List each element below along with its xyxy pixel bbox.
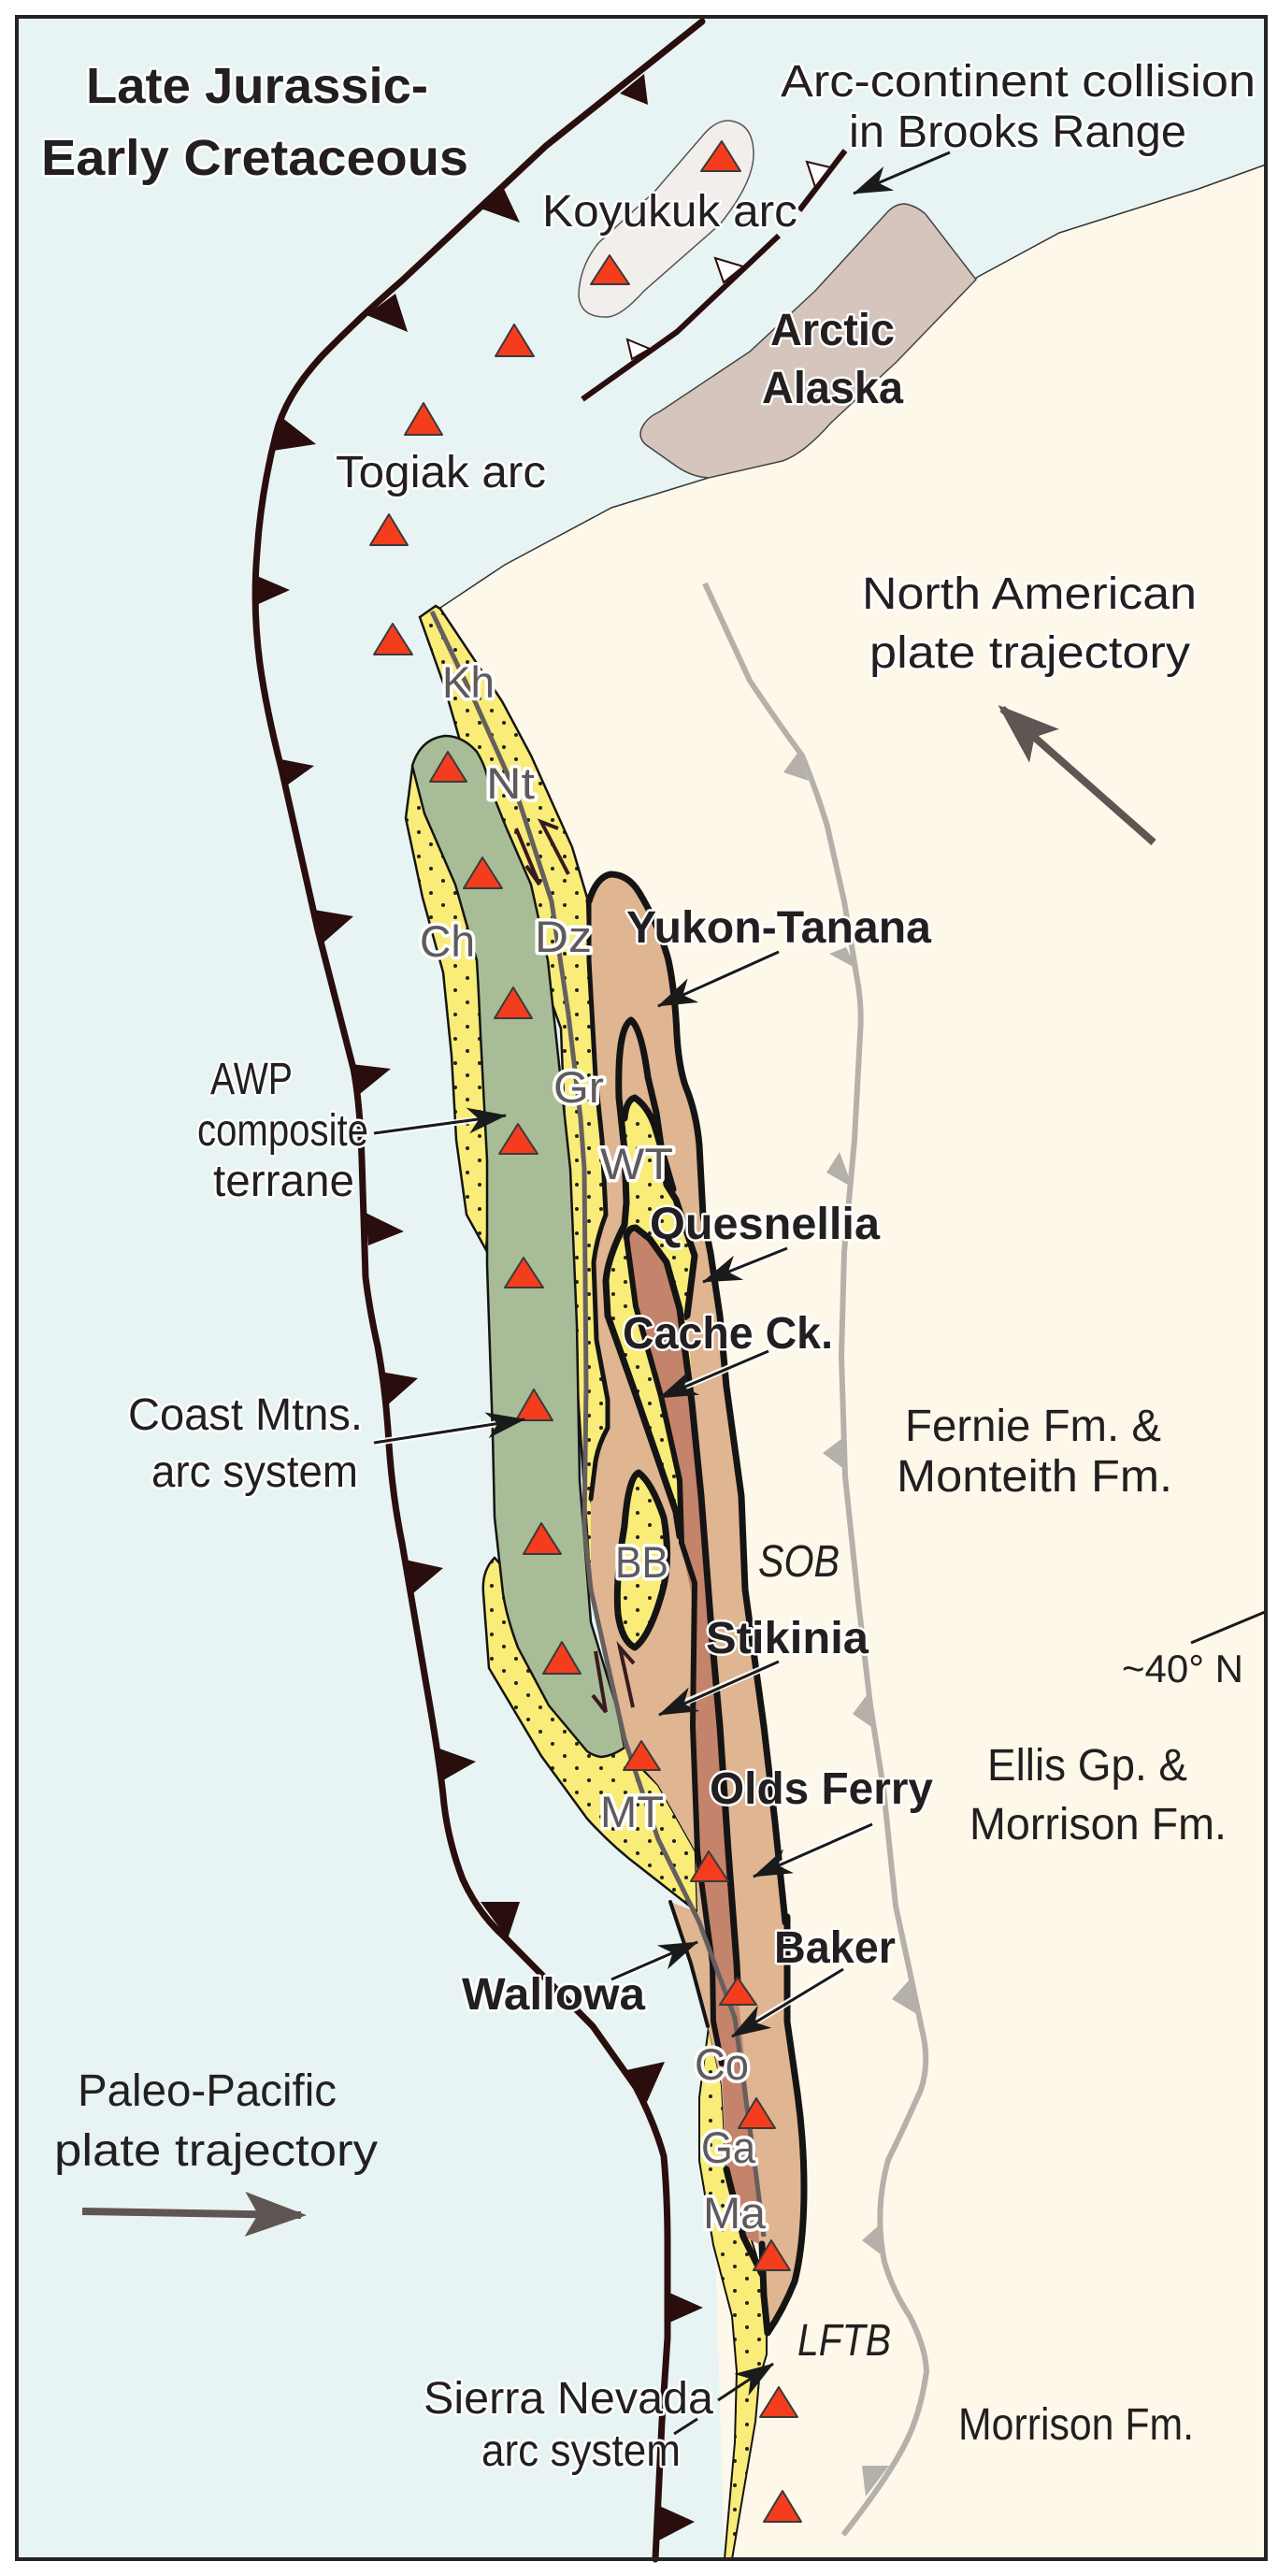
label: Kh: Kh [442,657,495,707]
label: Coast Mtns. arc system [128,1390,363,1497]
label: Sierra Nevada arc system: arc system [481,2426,681,2476]
label: Cache Ck.: Cache Ck. [623,1309,833,1359]
label: Ellis Gp. & Morrison Fm.: Ellis Gp. & [987,1741,1187,1791]
terrane: WT and Cache Creek yellow basin [606,1098,696,1536]
fault: grey strike-slip fault [432,612,764,2237]
label: Paleo-Pacific plate trajectory [54,2066,378,2176]
leader arrows [374,152,950,2434]
label: AWP composite terrane: terrane [213,1157,354,1206]
label: Ga: Ga [701,2123,756,2172]
label: Arctic Alaska: Alaska [762,364,903,413]
label: Paleo-Pacific plate trajectory: plate trajectory [54,2126,378,2176]
label: Ch: Ch [420,916,475,966]
terrane: Arctic Alaska [640,204,976,478]
icon: half arrows showing strike-slip sense, north [516,822,568,885]
label: North American plate trajectory: plate trajectory [869,628,1190,678]
icons: red volcanic arc triangles [370,141,801,2522]
label: MT: MT [600,1787,664,1836]
terrane: MT basin [483,1558,697,1912]
terrane: Cache Creek red-brown strip [626,1228,759,2244]
label: LFTB: LFTB [797,2316,891,2366]
label: Co: Co [695,2039,749,2089]
label: Togiak arc: Togiak arc [336,448,546,497]
boundaries: thick black terrane contacts [589,874,804,2333]
label: Gr: Gr [553,1062,604,1112]
label: AWP composite terrane: composite [197,1106,368,1156]
terrane: Koyukuk arc [579,121,754,317]
title [41,58,468,186]
label: ~40 N: ~40° N [1122,1647,1243,1691]
terrane: Ch basin [406,768,495,1250]
label: AWP composite terrane: AWP [210,1055,293,1104]
label: Baker: Baker [774,1923,896,1973]
label: Ellis Gp. & Morrison Fm.: Morrison Fm. [969,1800,1227,1849]
label: Coast Mtns. arc system: arc system [151,1447,358,1497]
label: Arc-continent collision in Brooks Range [781,57,1256,157]
label: Paleo-Pacific plate trajectory: Paleo-Pacific [78,2066,337,2116]
terrane: tan Stikinia / Yukon-Tanana body [589,874,804,2333]
coastline [440,165,1266,608]
leader line: ~40 N [1191,1612,1265,1643]
label: Sierra Nevada arc system: Sierra Nevada [424,2374,713,2424]
arrow: North American plate trajectory [1002,709,1154,842]
label: BB: BB [615,1537,668,1587]
label: Arctic Alaska [762,306,903,413]
label: Koyukuk arc: Koyukuk arc [542,187,797,237]
label: Wallowa: Wallowa [462,1970,645,2020]
label: Fernie Fm. & Monteith Fm.: Fernie Fm. & [905,1402,1161,1451]
label: Dz: Dz [535,912,592,961]
label: Fernie Fm. & Monteith Fm.: Monteith Fm. [897,1452,1172,1502]
label: Stikinia: Stikinia [706,1614,869,1663]
title: Late Jurassic- [86,58,428,114]
label: North American plate trajectory: North American [862,569,1197,619]
label: AWP composite terrane [197,1055,368,1206]
terrane: AWP composite green [412,736,625,1757]
fault: offshore trench with teeth [254,22,703,2559]
arrow: Paleo-Pacific plate trajectory [82,2211,301,2215]
label: Quesnellia: Quesnellia [650,1200,880,1249]
label: Fernie Fm. & Monteith Fm. [897,1402,1172,1502]
label: Morrison Fm.: Morrison Fm. [958,2400,1194,2450]
label: Sierra Nevada arc system [424,2374,713,2476]
label: Arctic Alaska: Arctic [770,306,895,355]
icon: half arrows showing strike-slip sense, south [593,1648,634,1712]
label: Olds Ferry: Olds Ferry [710,1764,933,1814]
title: Early Cretaceous [41,130,468,186]
label: Nt: Nt [486,758,535,808]
label: Arc-continent collision in Brooks Range: in Brooks Range [849,108,1186,157]
label: SOB: SOB [758,1537,840,1587]
panel: North American continent [440,165,1266,2559]
label: WT: WT [600,1139,673,1188]
label: Ellis Gp. & Morrison Fm. [969,1741,1227,1849]
terrane: Ga-Ma southern basin [699,2027,767,2559]
label: Yukon-Tanana: Yukon-Tanana [626,903,931,953]
fault: Brooks Range suture with open teeth [582,151,845,399]
terrane: Kh-Nt-Dz-Gr forearc strip [420,606,612,1608]
terrane: BB basin [617,1473,668,1648]
label: Arc-continent collision in Brooks Range: Arc-continent collision [781,57,1256,107]
label: North American plate trajectory [862,569,1197,678]
fault: inland grey thrust front with teeth [705,583,926,2535]
label: Ma: Ma [703,2188,767,2238]
label: Coast Mtns. arc system: Coast Mtns. [128,1390,363,1440]
